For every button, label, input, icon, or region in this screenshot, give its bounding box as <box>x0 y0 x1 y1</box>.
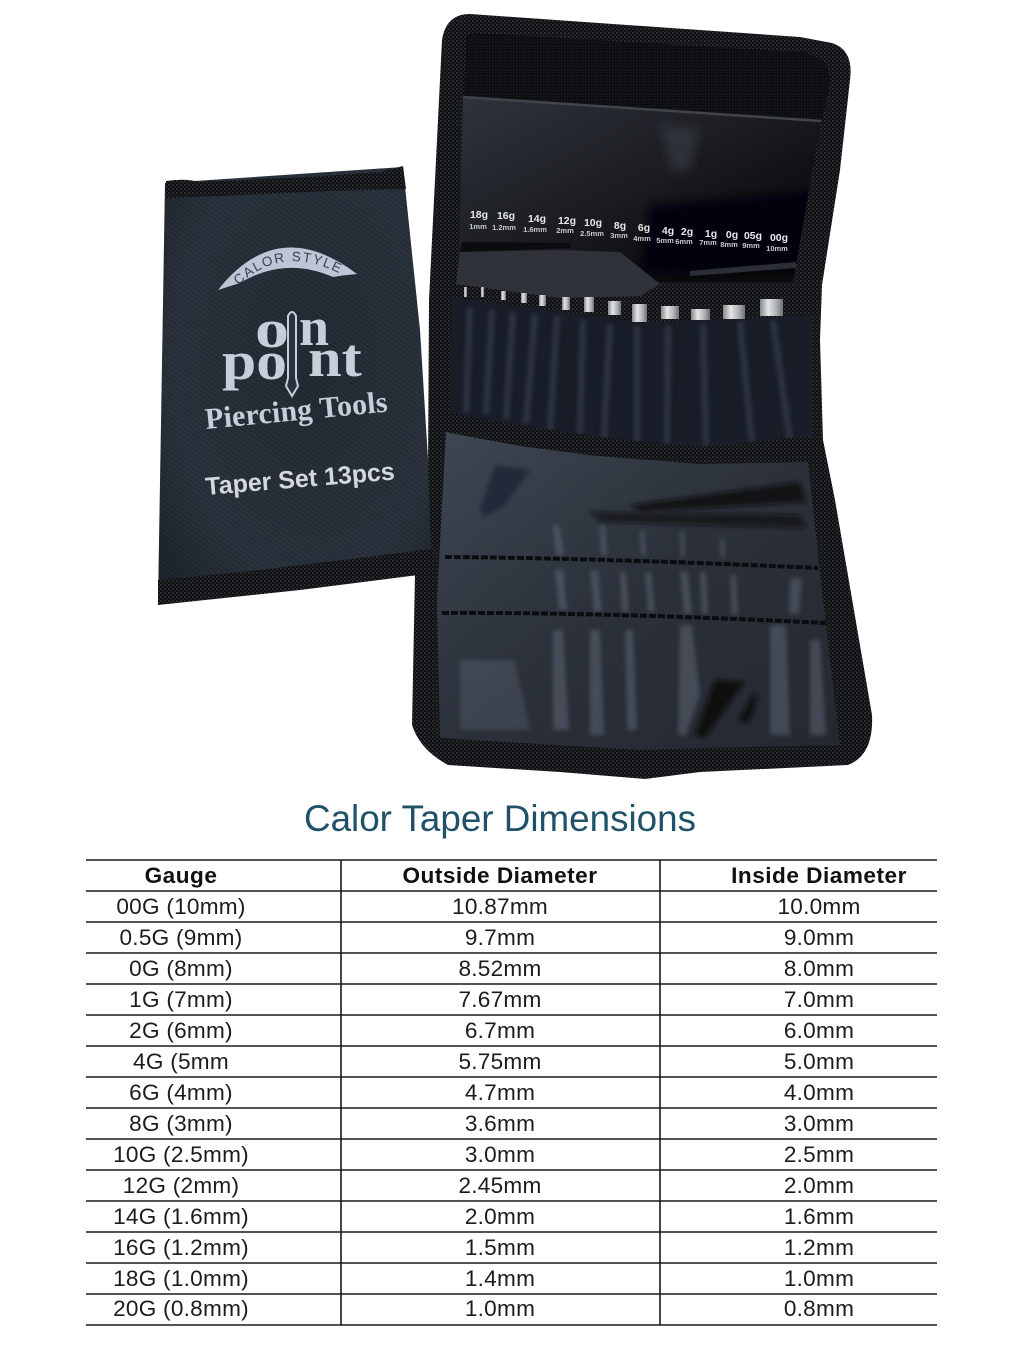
row 18G: 18G (1.0mm) <box>113 1266 249 1291</box>
gauge labels: 12g <box>558 215 576 227</box>
lining pleats <box>460 525 826 735</box>
row 2G: 6.0mm <box>784 1018 854 1043</box>
pouch top binding <box>165 166 406 198</box>
row 18G: 1.0mm <box>784 1266 854 1291</box>
row 10G: 2.5mm <box>784 1142 854 1167</box>
gauge labels: 8mm <box>720 240 738 249</box>
wallet binding outline <box>412 14 872 779</box>
row 4G: 5.75mm <box>458 1049 542 1074</box>
row 0G <box>129 956 854 981</box>
row 0G: 8.0mm <box>784 956 854 981</box>
taper row <box>464 287 783 322</box>
row 1G: 1G (7mm) <box>129 987 233 1012</box>
row 10G <box>113 1142 854 1167</box>
lining stitch lines <box>442 557 826 623</box>
row 14G: 1.6mm <box>784 1204 854 1229</box>
row 20G: 0.8mm <box>784 1296 854 1321</box>
row 0.5G: 9.0mm <box>784 925 854 950</box>
gauge labels: 2.5mm <box>580 229 604 238</box>
row 20G <box>113 1296 854 1321</box>
gauge labels: 00g <box>770 232 788 244</box>
gauge labels: 4mm <box>633 234 651 243</box>
header row: Gauge <box>145 863 217 888</box>
header row: Inside Diameter <box>731 863 907 888</box>
row 8G: 3.0mm <box>784 1111 854 1136</box>
row 0.5G: 0.5G (9mm) <box>119 925 243 950</box>
row 0.5G: 9.7mm <box>465 925 535 950</box>
logo: on point <box>222 297 362 396</box>
gauge labels <box>469 209 788 253</box>
row 0G: 8.52mm <box>458 956 542 981</box>
row 12G: 2.0mm <box>784 1173 854 1198</box>
pouch bottom binding <box>158 549 434 605</box>
row 20G: 20G (0.8mm) <box>113 1296 249 1321</box>
gauge labels: 16g <box>497 210 515 222</box>
title: Calor Taper Dimensions <box>304 798 696 839</box>
row 6G: 4.7mm <box>465 1080 535 1105</box>
lower pocket band <box>456 250 660 298</box>
gauge labels: 14g <box>528 213 546 225</box>
row 16G: 1.5mm <box>465 1235 535 1260</box>
row 14G: 14G (1.6mm) <box>113 1204 249 1229</box>
row 00G <box>116 894 861 919</box>
row 4G: 5.0mm <box>784 1049 854 1074</box>
gauge labels: 05g <box>744 230 762 242</box>
row 20G: 1.0mm <box>465 1296 535 1321</box>
logo banner: Calor Style: CALOR STYLE <box>234 252 342 284</box>
header row: Outside Diameter <box>402 863 598 888</box>
row 1G: 7.67mm <box>458 987 542 1012</box>
logo: on point: n <box>299 297 329 357</box>
row 0.5G <box>119 925 854 950</box>
gauge labels: 5mm <box>656 236 674 245</box>
row 16G: 16G (1.2mm) <box>113 1235 249 1260</box>
gauge labels: 1.6mm <box>523 225 547 234</box>
gauge labels: 7mm <box>699 238 717 247</box>
row 2G <box>129 1018 854 1043</box>
gauge labels: 10mm <box>766 244 788 253</box>
needle pocket stripes <box>466 308 790 446</box>
row 12G <box>123 1173 854 1198</box>
row 0G: 0G (8mm) <box>129 956 233 981</box>
lower lining panel <box>437 432 840 750</box>
row 2G: 6.7mm <box>465 1018 535 1043</box>
row 10G: 10G (2.5mm) <box>113 1142 249 1167</box>
panel: open wallet <box>412 14 872 779</box>
logo: on point: o <box>255 300 289 359</box>
pocket sheen <box>642 126 808 272</box>
row 1G <box>129 987 854 1012</box>
logo caption: Piercing Tools: Piercing Tools <box>204 386 389 436</box>
row 18G <box>113 1266 854 1291</box>
row 6G: 6G (4mm) <box>129 1080 233 1105</box>
row 2G: 2G (6mm) <box>129 1018 233 1043</box>
row 00G: 10.0mm <box>777 894 861 919</box>
row 18G: 1.4mm <box>465 1266 535 1291</box>
gauge labels: 0g <box>726 229 738 241</box>
row 8G <box>129 1111 854 1136</box>
gauge labels: 1.2mm <box>492 223 516 232</box>
logo: on point: nt <box>308 329 362 388</box>
logo: on point: po <box>222 331 287 391</box>
row 6G: 4.0mm <box>784 1080 854 1105</box>
lining dark folds <box>480 465 806 738</box>
row 8G: 8G (3mm) <box>129 1111 233 1136</box>
gauge labels: 2g <box>681 226 693 238</box>
row 8G: 3.6mm <box>465 1111 535 1136</box>
gauge labels: 6g <box>638 222 650 234</box>
gauge labels: 9mm <box>742 241 760 250</box>
row 14G <box>113 1204 854 1229</box>
gauge labels: 3mm <box>610 231 628 240</box>
gauge labels: 8g <box>614 220 626 232</box>
gauge labels: 4g <box>662 225 674 237</box>
gauge labels: 10g <box>584 217 602 229</box>
middle fold binding <box>450 413 811 464</box>
row 16G: 1.2mm <box>784 1235 854 1260</box>
header row <box>145 863 907 888</box>
pocket top seam <box>463 97 821 121</box>
row 1G: 7.0mm <box>784 987 854 1012</box>
gauge labels: 1mm <box>469 222 487 231</box>
icon: needle <box>286 312 298 396</box>
panel: closed pouch <box>158 166 432 605</box>
needle pocket section <box>450 298 812 450</box>
gauge labels: 18g <box>470 209 488 221</box>
pouch body <box>158 167 433 604</box>
table grid <box>86 860 937 1325</box>
row 00G: 10.87mm <box>452 894 548 919</box>
set label: Taper Set 13pcs: Taper Set 13pcs <box>204 458 396 501</box>
black lining pocket <box>458 97 821 282</box>
row 00G: 00G (10mm) <box>116 894 246 919</box>
row 10G: 3.0mm <box>465 1142 535 1167</box>
row 6G <box>129 1080 854 1105</box>
row 4G <box>133 1049 854 1074</box>
gauge labels: 1g <box>705 228 717 240</box>
row 12G: 12G (2mm) <box>123 1173 239 1198</box>
velcro strip <box>464 33 830 120</box>
dimensions table <box>86 860 937 1325</box>
row 16G <box>113 1235 854 1260</box>
row 4G: 4G (5mm <box>133 1049 229 1074</box>
row 12G: 2.45mm <box>458 1173 542 1198</box>
row 14G: 2.0mm <box>465 1204 535 1229</box>
gauge labels: 2mm <box>556 226 574 235</box>
gauge labels: 6mm <box>675 237 693 246</box>
